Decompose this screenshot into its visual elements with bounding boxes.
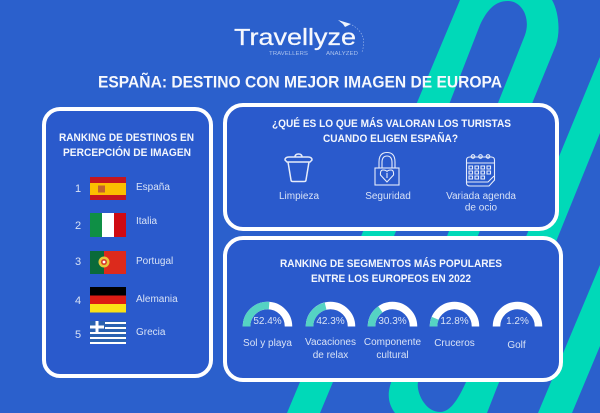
title: ESPAÑA: DESTINO CON MEJOR IMAGEN DE EUROPA — [98, 72, 502, 92]
flag: Grecia — [90, 321, 126, 344]
gauge labels: Cruceros — [434, 338, 475, 349]
icon labels: Limpieza — [279, 191, 319, 202]
flag: Alemania — [90, 287, 126, 312]
panel heading — [280, 257, 502, 285]
rank numbers: 1 — [75, 183, 81, 195]
rank numbers: 5 — [75, 329, 81, 341]
rank numbers: 2 — [75, 220, 81, 232]
gauge: Cruceros 12.8% — [434, 306, 476, 327]
gauge: Componente cultural 30.3%: 30.3% — [378, 316, 407, 327]
icon labels: Variada agenda — [446, 191, 516, 202]
panel heading — [59, 132, 194, 159]
gauge: Golf 1.2%: 1.2% — [506, 316, 529, 327]
gauge: Vacaciones de relax 42.3%: 42.3% — [316, 316, 345, 327]
gauge labels: Componente — [364, 337, 422, 348]
country names: Grecia — [136, 327, 166, 338]
icon labels — [279, 191, 516, 214]
gauge: Cruceros 12.8%: 12.8% — [440, 316, 469, 327]
gauge: Componente cultural 30.3% — [371, 306, 414, 327]
icon: calendar — [466, 155, 494, 186]
rank numbers — [75, 183, 81, 341]
logo: Travellyze — [234, 20, 364, 57]
panel: ranking de segmentos — [225, 238, 561, 380]
flag: Portugal — [90, 251, 126, 274]
rank numbers: 3 — [75, 256, 81, 268]
panel heading: CUANDO ELIGEN ESPAÑA? — [323, 132, 458, 145]
gauge labels: cultural — [376, 350, 409, 361]
logo: Travellyze: Travellyze — [234, 24, 356, 50]
country names: Portugal — [136, 256, 173, 267]
panel heading: RANKING DE DESTINOS EN — [59, 132, 194, 144]
gauge labels: Vacaciones — [305, 337, 356, 348]
gauge labels: Golf — [507, 340, 526, 351]
gauge labels — [243, 337, 526, 361]
logo: Travellyze: ANALYZED — [326, 51, 358, 57]
panel heading: ¿QUÉ ES LO QUE MÁS VALORAN LOS TURISTAS — [272, 117, 511, 130]
country names: España — [136, 182, 170, 193]
panel: qué valoran los turistas — [225, 105, 557, 229]
flag: España — [90, 177, 126, 200]
country names: Italia — [136, 216, 158, 227]
country names: Alemania — [136, 294, 178, 305]
icon labels: Seguridad — [365, 191, 411, 202]
flag: Italia — [90, 213, 126, 237]
country names — [136, 182, 178, 338]
gauge: Golf 1.2% — [496, 306, 538, 327]
panel heading: ENTRE LOS EUROPEOS EN 2022 — [311, 273, 471, 285]
logo: Travellyze: TRAVELLERS — [269, 51, 309, 57]
panel heading: PERCEPCIÓN DE IMAGEN — [63, 146, 191, 159]
gauge labels: de relax — [313, 350, 348, 361]
gauge: Sol y playa 52.4%: 52.4% — [253, 316, 282, 327]
background teal ribbon — [287, 0, 600, 413]
gauge: Sol y playa 52.4% — [246, 306, 288, 327]
panel heading — [272, 117, 511, 145]
rank numbers: 4 — [75, 295, 81, 307]
icon: padlock with shield — [375, 152, 399, 185]
panel heading: RANKING DE SEGMENTOS MÁS POPULARES — [280, 257, 502, 270]
gauge: Vacaciones de relax 42.3% — [310, 306, 352, 327]
icon labels: de ocio — [465, 202, 498, 214]
gauge labels: Sol y playa — [243, 338, 292, 349]
icon: bucket — [285, 154, 312, 182]
panel: ranking de destinos — [44, 109, 211, 376]
